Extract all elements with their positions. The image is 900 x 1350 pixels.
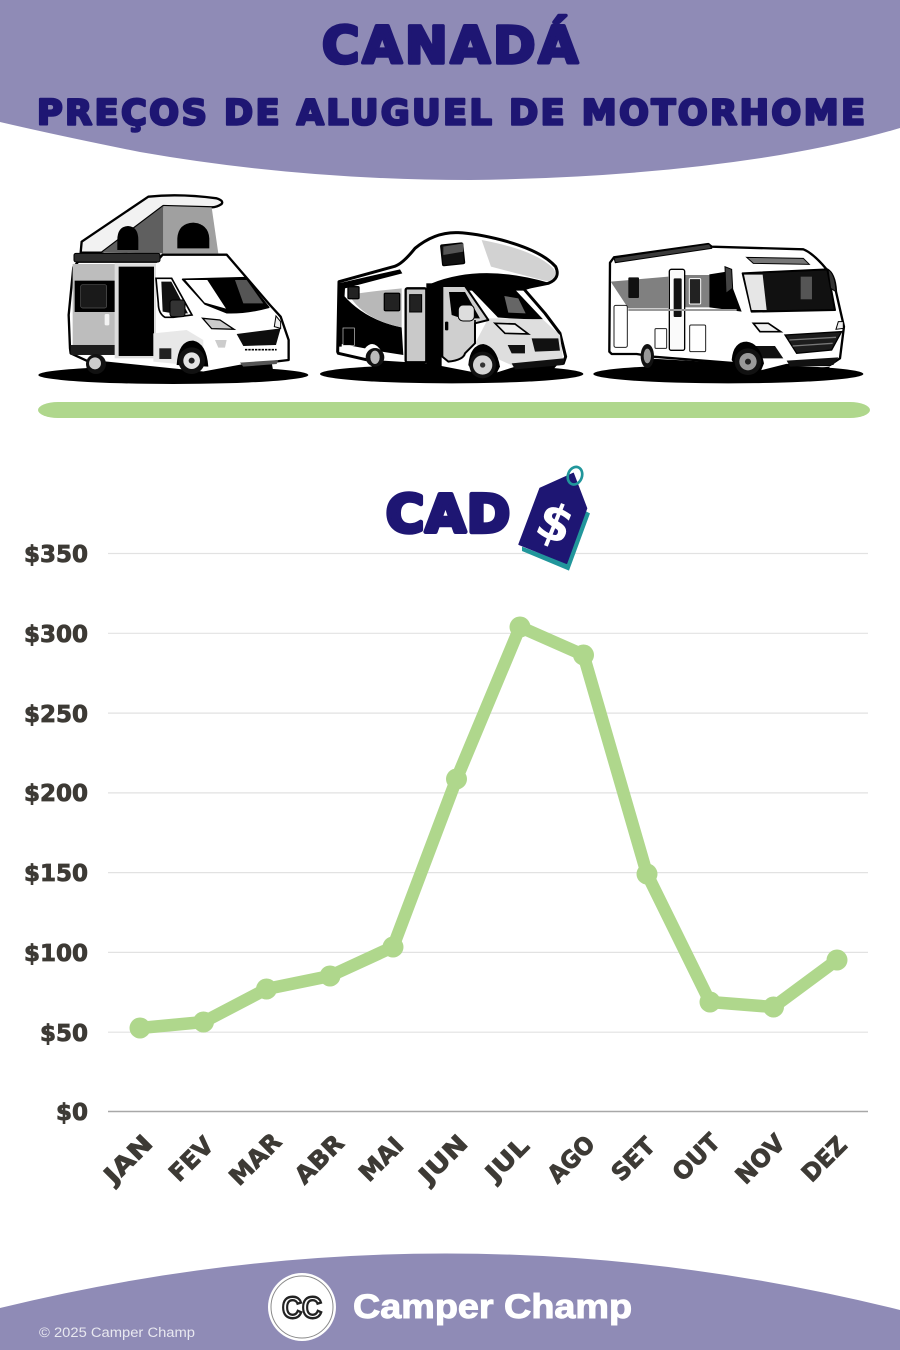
x axis labels: ABR bbox=[289, 1129, 350, 1190]
y axis labels: $0 bbox=[56, 1100, 88, 1126]
illustration: integrated motorhome bbox=[593, 244, 863, 383]
x axis labels bbox=[97, 1128, 853, 1191]
title: CANADÁ bbox=[322, 15, 579, 76]
subtitle: PREÇOS DE ALUGUEL DE MOTORHOME bbox=[37, 94, 865, 134]
x axis labels: NOV bbox=[730, 1129, 791, 1190]
x axis labels: AGO bbox=[542, 1130, 601, 1189]
footer banner bbox=[0, 1253, 900, 1350]
logo: CC bbox=[282, 1290, 322, 1325]
brand name: Camper Champ bbox=[353, 1288, 632, 1326]
y axis labels: $100 bbox=[24, 941, 88, 967]
logo bbox=[268, 1273, 336, 1341]
illustration: pop-top campervan bbox=[38, 195, 308, 384]
icon: price tag bbox=[519, 465, 590, 571]
y axis labels: $300 bbox=[24, 622, 88, 648]
header banner bbox=[0, 0, 900, 180]
price line bbox=[130, 616, 848, 1038]
y axis labels: $350 bbox=[24, 542, 88, 568]
y axis labels: $50 bbox=[40, 1021, 88, 1047]
x axis labels: FEV bbox=[163, 1131, 220, 1187]
illustration: overcab motorhome bbox=[320, 233, 583, 383]
x axis labels: JAN bbox=[97, 1129, 158, 1191]
icon: price tag: $ bbox=[528, 490, 582, 557]
line chart bbox=[24, 542, 868, 1191]
x axis labels: MAR bbox=[224, 1128, 287, 1191]
y axis labels: $150 bbox=[24, 861, 88, 887]
x axis labels: JUL bbox=[478, 1132, 535, 1189]
y axis labels bbox=[24, 542, 88, 1126]
y axis labels: $250 bbox=[24, 702, 88, 728]
x axis labels: MAI bbox=[353, 1131, 409, 1187]
x axis labels: JUN bbox=[412, 1129, 473, 1191]
copyright: © 2025 Camper Champ bbox=[39, 1325, 195, 1340]
x axis labels: OUT bbox=[667, 1128, 726, 1187]
green divider bar bbox=[38, 402, 870, 418]
currency label: CAD bbox=[386, 485, 510, 545]
x axis labels: DEZ bbox=[796, 1131, 853, 1188]
y axis labels: $200 bbox=[24, 781, 88, 807]
x axis labels: SET bbox=[606, 1131, 661, 1187]
